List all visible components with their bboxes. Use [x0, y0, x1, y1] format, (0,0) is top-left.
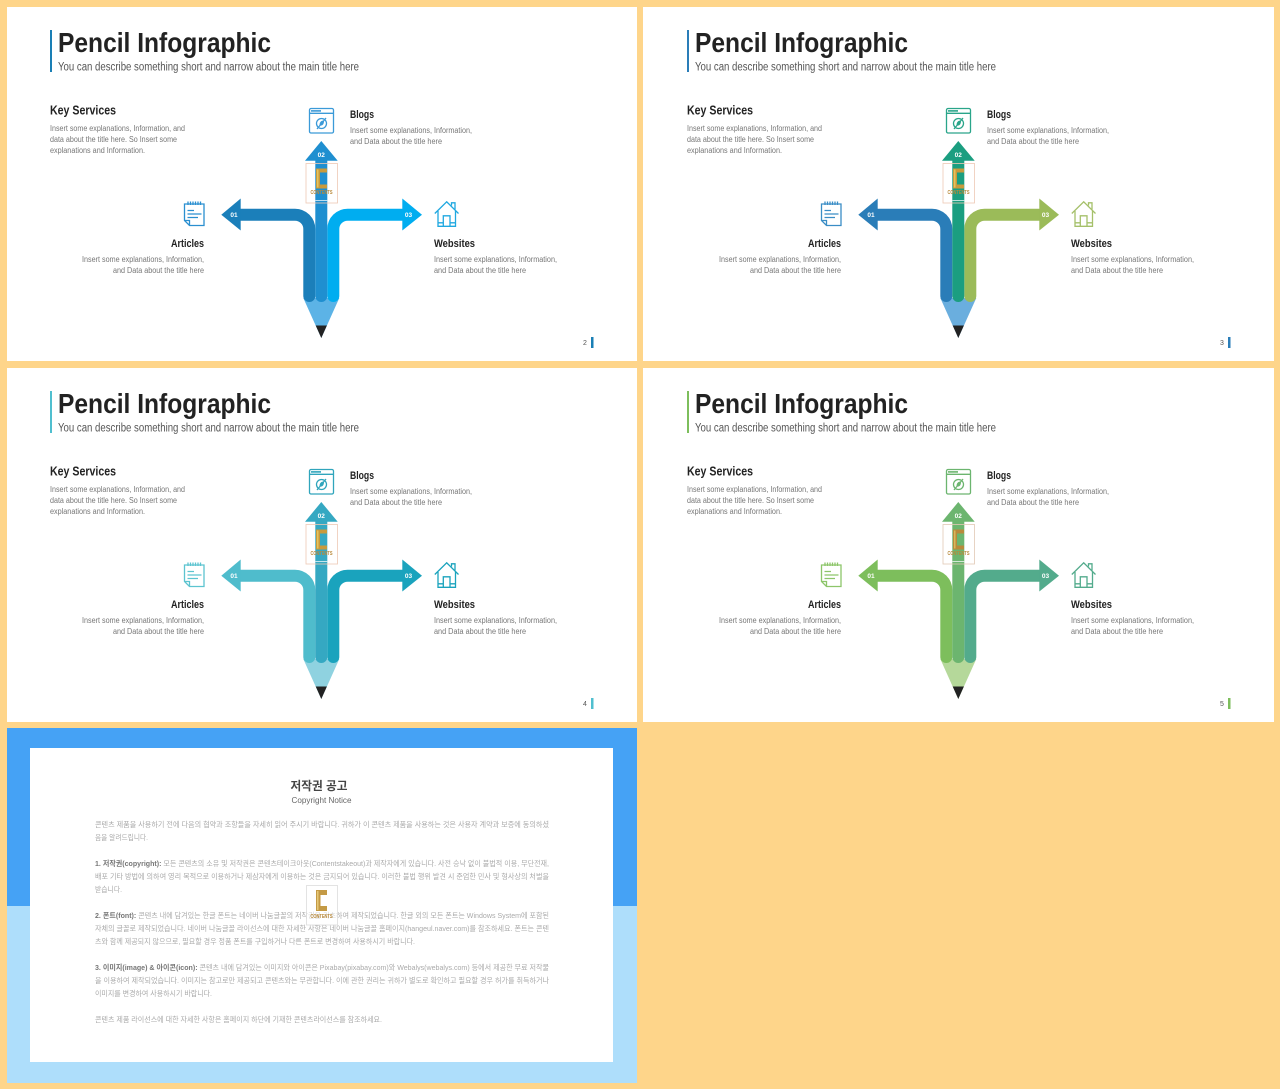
text block: introduction: 음을 알려드립니다. [95, 832, 148, 842]
text block: key services [50, 464, 185, 516]
text block: key services [50, 102, 185, 155]
text block: introduction [95, 819, 549, 842]
watermark [306, 886, 338, 925]
text block: articles: Insert some explanations, Information, [82, 255, 204, 264]
text block: articles [82, 238, 204, 275]
text block: articles [82, 599, 204, 636]
panel: slide 3 blue green pencil infographic [643, 7, 1274, 361]
watermark [306, 164, 338, 203]
text block: key services: explanations and Information. [687, 507, 782, 516]
pencil arrows: 01 [867, 573, 875, 580]
title block: Pencil Infographic [695, 27, 908, 58]
title block: Pencil Infographic [695, 388, 908, 419]
page number [583, 337, 594, 348]
text block: key services: explanations and Information. [50, 146, 145, 155]
icon: blog window [946, 108, 970, 133]
title block: You can describe something short and narrow about the main title here [58, 422, 359, 434]
text block: blogs: and Data about the title here [987, 498, 1079, 507]
text block: copyright clause: 받습니다. [95, 884, 122, 894]
icon: website house [1072, 563, 1096, 587]
text block: blogs: and Data about the title here [350, 137, 442, 146]
watermark: CONTENTS [310, 914, 333, 920]
text block: key services: Insert some explanations, Information, and [687, 485, 822, 494]
watermark: CONTENTS [310, 190, 333, 196]
text block: key services: data about the title here. So Insert some [50, 496, 177, 505]
icon: website house [1072, 202, 1096, 226]
text block: key services: explanations and Information. [50, 507, 145, 516]
text block: image clause [95, 962, 549, 998]
text block: websites [434, 599, 557, 636]
text block: license note: 콘텐츠 제품 라이선스에 대한 자세한 사항은 홈페이지 하단에 기재한 콘텐츠라이선스를 참조하세요. [95, 1014, 382, 1024]
text block: key services: Key Services [687, 464, 753, 478]
page number: 5 [1220, 701, 1224, 708]
text block: articles: Articles [171, 238, 204, 250]
pencil arrows [221, 141, 422, 338]
text block: copyright clause: 1. 저작권(copyright): 모든 콘텐츠의 소유 및 저작권은 콘텐츠테이크아웃(Contentstakeout)과 제작자에게 있습니다. 사전 승낙 없이 불법적 이용, 무단전재, [95, 858, 549, 868]
text block: blogs: Insert some explanations, Information, [350, 487, 472, 496]
title block [687, 27, 996, 74]
icon: website house [435, 202, 458, 226]
text block: articles [719, 599, 841, 636]
watermark [943, 164, 974, 203]
text block: key services: Key Services [50, 102, 116, 118]
text block: articles: Insert some explanations, Information, [82, 616, 204, 625]
text block: blogs: Insert some explanations, Information, [350, 126, 472, 135]
text block: articles: and Data about the title here [750, 627, 841, 636]
page number: 4 [583, 701, 587, 708]
text block: websites: Insert some explanations, Information, [1071, 255, 1194, 264]
text block: blogs: Insert some explanations, Information, [987, 126, 1109, 135]
text block: key services: Insert some explanations, Information, and [50, 485, 185, 494]
text block: websites: and Data about the title here [1071, 627, 1163, 636]
text block: blogs [350, 109, 472, 146]
pencil arrows: 02 [318, 513, 325, 520]
watermark: CONTENTS [948, 190, 970, 196]
text block: image clause: 을 이용하여 제작되었습니다. 이미지는 참고로만 제공되고 콘텐츠와는 무관합니다. 이에 관한 권리는 귀하가 별도로 확인하고 필요할 경우 허가를 취득하거나 [95, 975, 549, 985]
text block: articles: Articles [808, 599, 841, 611]
page number [1220, 337, 1230, 348]
text block: blogs: Blogs [987, 470, 1011, 482]
text block: key services: explanations and Information. [687, 146, 782, 155]
text block: articles: Articles [808, 238, 841, 250]
text block: blogs [350, 470, 472, 507]
text block: articles: and Data about the title here [113, 266, 204, 275]
text block: websites: Websites [1071, 599, 1112, 611]
text block: copyright clause [95, 858, 549, 894]
text block: articles: Insert some explanations, Information, [719, 616, 841, 625]
text block: image clause: 3. 이미지(image) & 아이콘(icon): 콘텐츠 내에 담겨있는 이미지와 아이콘은 Pixabay(pixabay.com)와 Webalys(webalys.com) 등에서 제공한 무료 저작물 [95, 962, 549, 972]
icon: article notepad [822, 562, 841, 586]
text block: websites: and Data about the title here [434, 627, 526, 636]
icon: blog window [310, 470, 334, 494]
panel: slide 2 blue pencil infographic [7, 7, 637, 361]
text block: websites: and Data about the title here [1071, 266, 1163, 275]
text block: blogs: Blogs [987, 109, 1011, 121]
text block: articles: Articles [171, 599, 204, 611]
heading: copyright notice: 저작권 공고 [290, 778, 348, 793]
page number: 3 [1220, 340, 1224, 347]
title block [687, 388, 996, 434]
icon: blog window [310, 108, 334, 133]
text block: font clause: 자체의 글꼴로 제작되었습니다. 네이버 나눔글꼴 라이선스에 대한 자세한 사항은 네이버 나눔글꼴 홈페이지(hangeul.naver.com)를 참조하세요. 폰트는 콘텐 [95, 923, 549, 933]
watermark [943, 524, 974, 564]
text block: key services: data about the title here. So Insert some [687, 496, 814, 505]
text block: blogs: and Data about the title here [987, 137, 1079, 146]
watermark [306, 524, 338, 564]
text block: font clause: 2. 폰트(font): 콘텐츠 내에 담겨있는 한글 폰트는 네이버 나눔글꼴의 저작권을 기초하여 제작되었습니다. 한글 외의 모든 폰트는 Windows System에 포함된 [95, 910, 549, 920]
icon: website house [435, 563, 458, 587]
text block: articles [719, 238, 841, 275]
text block: websites: Insert some explanations, Information, [1071, 616, 1194, 625]
title block: You can describe something short and narrow about the main title here [58, 62, 359, 74]
panel: copyright notice [7, 728, 637, 1083]
title block: Pencil Infographic [58, 27, 271, 58]
pencil arrows: 03 [1042, 212, 1049, 219]
text block: websites: and Data about the title here [434, 266, 526, 275]
pencil arrows: 03 [405, 212, 412, 219]
pencil arrows: 01 [230, 573, 238, 580]
pencil arrows: 03 [405, 573, 412, 580]
title block: You can describe something short and narrow about the main title here [695, 62, 996, 74]
pencil arrows [221, 502, 422, 699]
text block: websites: Websites [434, 599, 475, 611]
text block: websites: Insert some explanations, Information, [434, 616, 557, 625]
text block: articles: and Data about the title here [113, 627, 204, 636]
pencil arrows: 02 [955, 152, 962, 159]
heading: copyright notice: Copyright Notice [292, 795, 352, 805]
pencil arrows [858, 141, 1059, 338]
pencil arrows: 01 [867, 212, 875, 219]
text block: key services: Insert some explanations, Information, and [50, 124, 185, 133]
text block: copyright clause: 배포 기타 방법에 의하여 영리 목적으로 이용하거나 제삼자에게 이용하는 것은 금지되어 있습니다. 이러한 불법 행위 발견 시 준엄한 민사 및 형사상의 처벌을 [95, 871, 549, 881]
title block [50, 27, 359, 74]
text block: blogs: and Data about the title here [350, 498, 442, 507]
text block: websites [1071, 238, 1194, 275]
pencil arrows: 02 [318, 152, 325, 159]
text block: websites: Insert some explanations, Information, [434, 255, 557, 264]
text block: key services [687, 102, 822, 155]
title block: Pencil Infographic [58, 388, 271, 419]
text block: websites [1071, 599, 1194, 636]
watermark: CONTENTS [948, 551, 970, 557]
text block: blogs: Blogs [350, 470, 374, 482]
pencil arrows: 03 [1042, 573, 1049, 580]
text block: key services: data about the title here. So Insert some [687, 135, 814, 144]
text block: websites: Websites [1071, 238, 1112, 250]
text block: blogs [987, 470, 1109, 507]
text block: blogs: Blogs [350, 109, 374, 121]
text block: websites [434, 238, 557, 275]
page number [583, 698, 594, 709]
text block: key services: data about the title here. So Insert some [50, 135, 177, 144]
text block: blogs: Insert some explanations, Information, [987, 487, 1109, 496]
icon: article notepad [184, 202, 204, 226]
text block: font clause: 츠와 함께 제공되지 않으므로, 필요할 경우 정품 폰트를 구입하거나 다른 폰트로 변경하여 사용하시기 바랍니다. [95, 936, 415, 946]
text block: key services: Key Services [687, 102, 753, 118]
title block [50, 388, 359, 434]
text block: blogs [987, 109, 1109, 146]
panel: slide 5 green pencil infographic [643, 368, 1274, 722]
text block: introduction: 콘텐츠 제품을 사용하기 전에 다음의 협약과 조항들을 자세히 읽어 주시기 바랍니다. 귀하가 이 콘텐츠 제품을 사용하는 것은 사용자 계약과 보증에 동의하셨 [95, 819, 549, 829]
text block: key services: Insert some explanations, Information, and [687, 124, 822, 133]
pencil arrows: 01 [230, 212, 238, 219]
icon: article notepad [822, 202, 841, 226]
text block: font clause [95, 910, 549, 946]
panel: slide 4 teal pencil infographic [7, 368, 637, 722]
heading: copyright notice [290, 778, 352, 805]
text block: websites: Websites [434, 238, 475, 250]
text block: image clause: 이미지를 변경하여 사용하시기 바랍니다. [95, 988, 212, 998]
icon: article notepad [184, 562, 204, 586]
text block: key services [687, 464, 822, 516]
pencil arrows: 02 [955, 513, 962, 520]
title block: You can describe something short and narrow about the main title here [695, 422, 996, 434]
pencil arrows [858, 502, 1059, 699]
icon: blog window [946, 470, 970, 494]
text block: articles: Insert some explanations, Information, [719, 255, 841, 264]
watermark: CONTENTS [310, 551, 333, 557]
page number: 2 [583, 340, 587, 347]
page number [1220, 698, 1230, 709]
text block: articles: and Data about the title here [750, 266, 841, 275]
text block: key services: Key Services [50, 464, 116, 478]
